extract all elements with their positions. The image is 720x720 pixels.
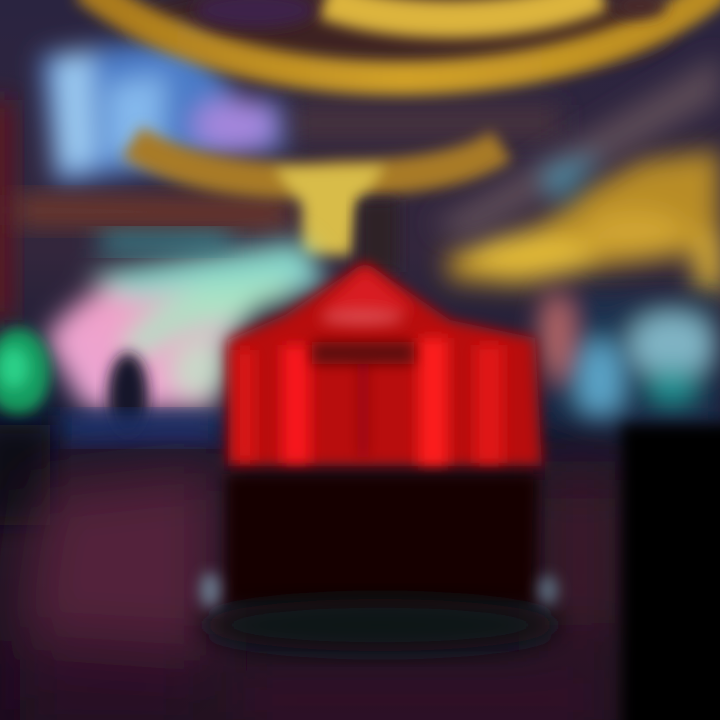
carousel: bright red stripes	[235, 338, 503, 466]
left lights: teal band	[100, 232, 230, 252]
ceiling light: blue panel	[40, 35, 285, 185]
foreground: black box at right	[622, 425, 720, 720]
carousel: platform	[200, 599, 560, 651]
ceiling beam: brown band	[15, 195, 290, 228]
carousel: central pole	[358, 200, 398, 272]
left lights: rainbow arch	[45, 240, 325, 410]
carousel: platform highlights	[200, 572, 558, 608]
chandelier: golden arc and column	[132, 142, 502, 255]
right lights: blue and teal machines	[539, 290, 720, 420]
carousel: tent roof highlight	[320, 268, 415, 326]
carousel: red tent	[228, 262, 542, 466]
carousel: dark sign band	[312, 342, 414, 457]
carousel: dark base	[226, 474, 538, 605]
left lights: dark figure	[108, 353, 148, 437]
right lights: golden shapes	[445, 150, 720, 295]
ceiling: dark upper panel	[130, 0, 670, 140]
ceiling detail: dark gaps in the ring	[195, 0, 666, 28]
left lights: blue machines	[60, 415, 220, 441]
left machine: dark shape	[0, 425, 50, 525]
ceiling ring: large golden arc	[85, 0, 720, 78]
right ceiling: diagonal blue beams	[430, 55, 720, 240]
left light: green glow	[0, 328, 50, 416]
floor: maroon carpet	[20, 470, 615, 720]
left wall: dark red column	[0, 100, 14, 320]
